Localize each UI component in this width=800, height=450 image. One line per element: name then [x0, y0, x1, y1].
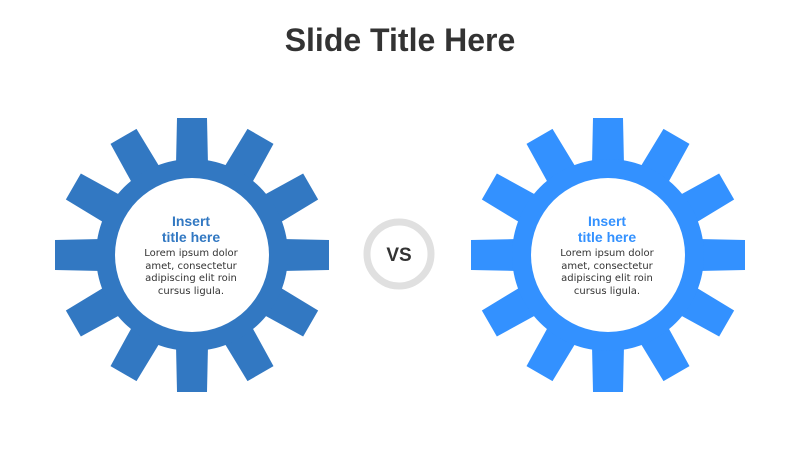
text block right: Lorem ipsum dolor: [560, 248, 654, 259]
gear right: [471, 118, 745, 392]
text block right: adipiscing elit roin: [561, 273, 653, 284]
vs badge: VS: [386, 245, 412, 266]
vs badge: [367, 222, 431, 286]
text block left: amet, consectetur: [145, 261, 237, 272]
text block left: Lorem ipsum dolor: [144, 248, 238, 259]
text block right: [560, 213, 654, 297]
title: Slide Title Here: [285, 22, 515, 58]
gear left: [55, 118, 329, 392]
text block right: cursus ligula.: [574, 286, 640, 297]
text block left: title here: [162, 229, 220, 245]
text block left: [144, 213, 238, 297]
text block right: amet, consectetur: [561, 261, 653, 272]
text block left: adipiscing elit roin: [145, 273, 237, 284]
text block left: cursus ligula.: [158, 286, 224, 297]
text block left: Insert: [172, 213, 210, 229]
text block right: Insert: [588, 213, 626, 229]
text block right: title here: [578, 229, 636, 245]
